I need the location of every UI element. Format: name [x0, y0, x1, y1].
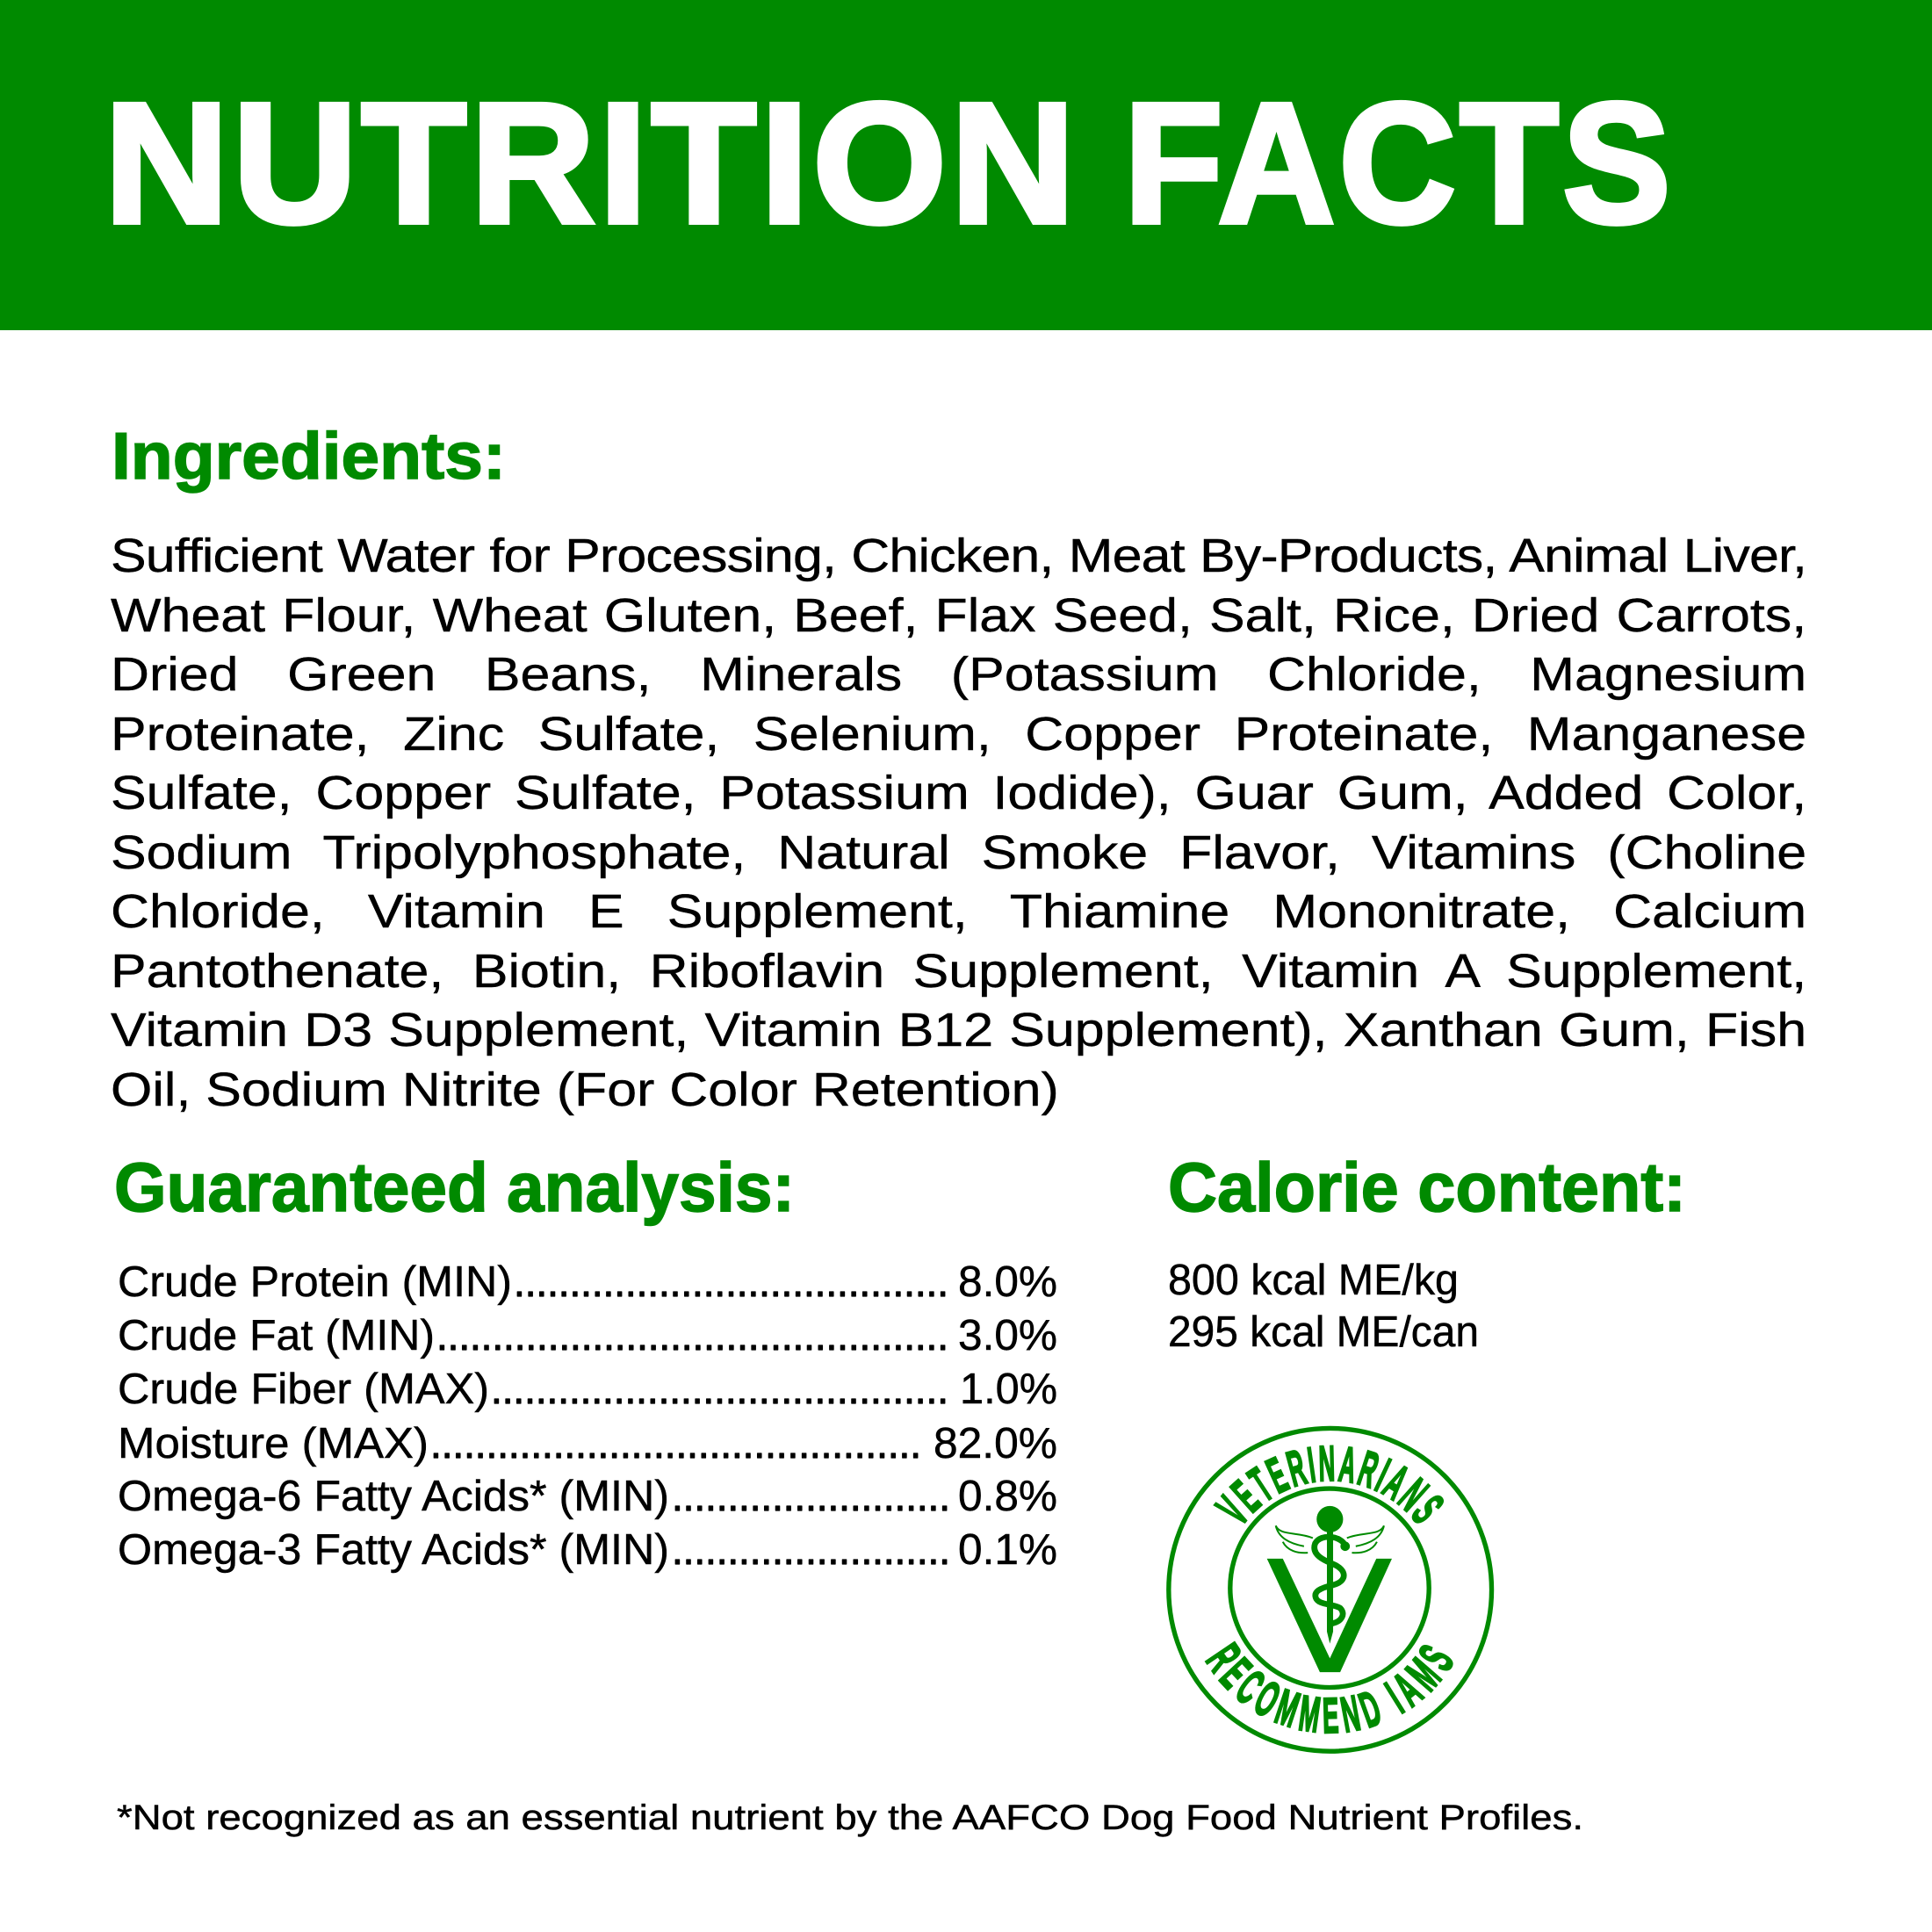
title: FACTS — [1124, 68, 1675, 259]
footnote: *Not recognized as an essential nutrient by the AAFCO Dog Food Nutrient Profiles. — [117, 1799, 1583, 1837]
ingredients paragraph: Sodium Tripolyphosphate, Natural Smoke Flavor, Vitamins (Choline — [111, 825, 1806, 878]
title — [105, 68, 1675, 259]
row: omega-3 — [118, 1526, 1057, 1574]
ingredients paragraph: Vitamin D3 Supplement, Vitamin B12 Supplement), Xanthan Gum, Fish — [111, 1004, 1806, 1056]
row: omega-3: ......................... — [672, 1527, 950, 1573]
row: crude fiber: 1.0% — [960, 1366, 1057, 1413]
calorie values: 800 kcal ME/kg — [1168, 1257, 1459, 1304]
ingredients paragraph: Chloride, Vitamin E Supplement, Thiamine Mononitrate, Calcium — [111, 885, 1806, 938]
title: NUTRITION — [105, 68, 1079, 259]
heading: guaranteed analysis: Guaranteed analysis: — [114, 1148, 795, 1226]
outer ring — [1169, 1428, 1492, 1751]
row: moisture: 82.0% — [934, 1420, 1057, 1467]
icon: staff — [1327, 1519, 1333, 1644]
icon: wings — [1276, 1525, 1384, 1553]
icon: snake — [1315, 1537, 1350, 1623]
ingredients paragraph: Wheat Flour, Wheat Gluten, Beef, Flax Seed, Salt, Rice, Dried Carrots, — [111, 588, 1806, 641]
row: omega-6 — [118, 1473, 1057, 1520]
row: omega-6: Omega-6 Fatty Acids* (MIN) — [118, 1473, 669, 1520]
badge text top: VETERINARIANS — [1213, 1445, 1444, 1524]
calorie values — [1168, 1257, 1479, 1356]
ingredients paragraph: Sulfate, Copper Sulfate, Potassium Iodide), Guar Gum, Added Color, — [111, 767, 1806, 819]
row: crude fiber: Crude Fiber (MAX) — [118, 1366, 489, 1413]
ingredients paragraph: Oil, Sodium Nitrite (For Color Retention) — [111, 1063, 1059, 1115]
row: omega-6: ......................... — [672, 1474, 950, 1519]
badge text bottom: RECOMMEND IAMS — [1205, 1640, 1453, 1734]
icon: staff ball — [1316, 1506, 1343, 1532]
row: moisture: ............................................ — [430, 1421, 921, 1467]
ingredients paragraph: Dried Green Beans, Minerals (Potassium Chloride, Magnesium — [111, 648, 1806, 701]
ingredients paragraph — [111, 530, 1806, 1115]
row: moisture — [118, 1420, 1057, 1467]
heading: calorie content: Calorie content: — [1168, 1148, 1686, 1226]
header band — [0, 0, 1932, 330]
row: moisture: Moisture (MAX) — [118, 1420, 429, 1467]
row: omega-6: 0.8% — [958, 1473, 1057, 1520]
inner ring — [1230, 1489, 1429, 1688]
heading: ingredients: Ingredients: — [112, 419, 506, 493]
ingredients paragraph: Sufficient Water for Processing, Chicken, Meat By-Products, Animal Liver, — [111, 530, 1806, 582]
guaranteed analysis table — [118, 1258, 1057, 1574]
row: crude fat: 3.0% — [958, 1312, 1057, 1359]
row: crude fiber: ......................................... — [491, 1366, 948, 1412]
badge: veterinarians recommend iams — [1166, 1426, 1495, 1754]
icon: V — [1267, 1559, 1392, 1672]
row: crude fiber — [118, 1366, 1057, 1413]
row: omega-3: 0.1% — [958, 1526, 1057, 1574]
row: omega-3: Omega-3 Fatty Acids* (MIN) — [118, 1526, 669, 1574]
row: crude protein: 8.0% — [958, 1258, 1057, 1306]
row: crude fat: Crude Fat (MIN) — [118, 1312, 435, 1359]
calorie values: 295 kcal ME/can — [1168, 1308, 1479, 1356]
row: crude protein: Crude Protein (MIN) — [118, 1258, 512, 1306]
row: crude protein — [118, 1258, 1057, 1306]
row: crude fat — [118, 1312, 1057, 1359]
row: crude protein: ....................................... — [514, 1259, 948, 1305]
row: crude fat: .............................................. — [436, 1313, 948, 1359]
ingredients paragraph: Pantothenate, Biotin, Riboflavin Supplement, Vitamin A Supplement, — [111, 945, 1806, 998]
ingredients paragraph: Proteinate, Zinc Sulfate, Selenium, Copper Proteinate, Manganese — [111, 708, 1806, 761]
